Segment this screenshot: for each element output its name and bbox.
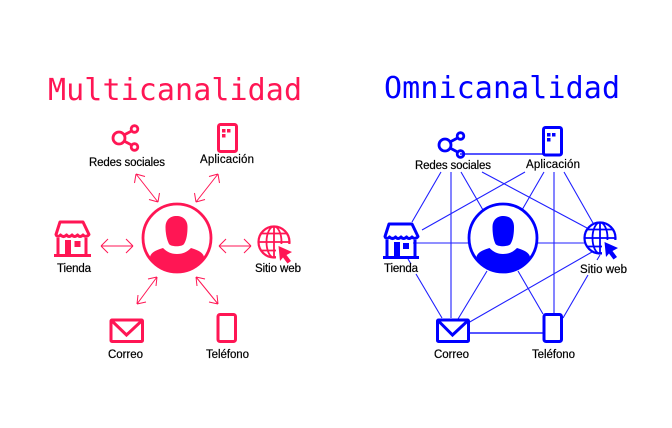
connection network — [408, 154, 600, 333]
label: Correo: Correo — [434, 349, 469, 361]
icon: phone — [218, 313, 236, 342]
icon: mobile app — [218, 123, 236, 152]
icon: website globe with cursor — [584, 222, 619, 260]
title: Omnicanalidad: Omnicanalidad — [384, 71, 620, 106]
icon: share network — [439, 133, 464, 157]
icon: mail — [438, 320, 468, 342]
icon: website globe with cursor — [258, 226, 293, 264]
icon: phone — [544, 313, 562, 342]
label: Redes sociales: Redes sociales — [89, 157, 165, 169]
label: Aplicación: Aplicación — [526, 159, 580, 171]
icon: customer profile — [143, 204, 211, 272]
icon: store — [383, 224, 419, 258]
label: Tienda: Tienda — [384, 263, 419, 275]
panel: omnicanalidad — [383, 71, 627, 361]
label: Teléfono: Teléfono — [532, 349, 575, 361]
icon: store — [54, 222, 91, 256]
arrows: customer to channels — [101, 174, 251, 304]
label: Teléfono: Teléfono — [206, 349, 249, 361]
label: Aplicación: Aplicación — [200, 154, 254, 166]
panel: multicanalidad — [48, 73, 302, 361]
icon: mobile app — [544, 126, 562, 155]
label: Correo: Correo — [108, 349, 143, 361]
title: Multicanalidad: Multicanalidad — [48, 73, 302, 108]
label: Tienda: Tienda — [57, 263, 92, 275]
label: Sitio web: Sitio web — [580, 264, 627, 276]
icon: share network — [113, 126, 138, 150]
icon: customer profile — [469, 204, 537, 272]
label: Sitio web: Sitio web — [255, 263, 301, 275]
label: Redes sociales: Redes sociales — [415, 160, 491, 172]
icon: mail — [111, 320, 142, 342]
